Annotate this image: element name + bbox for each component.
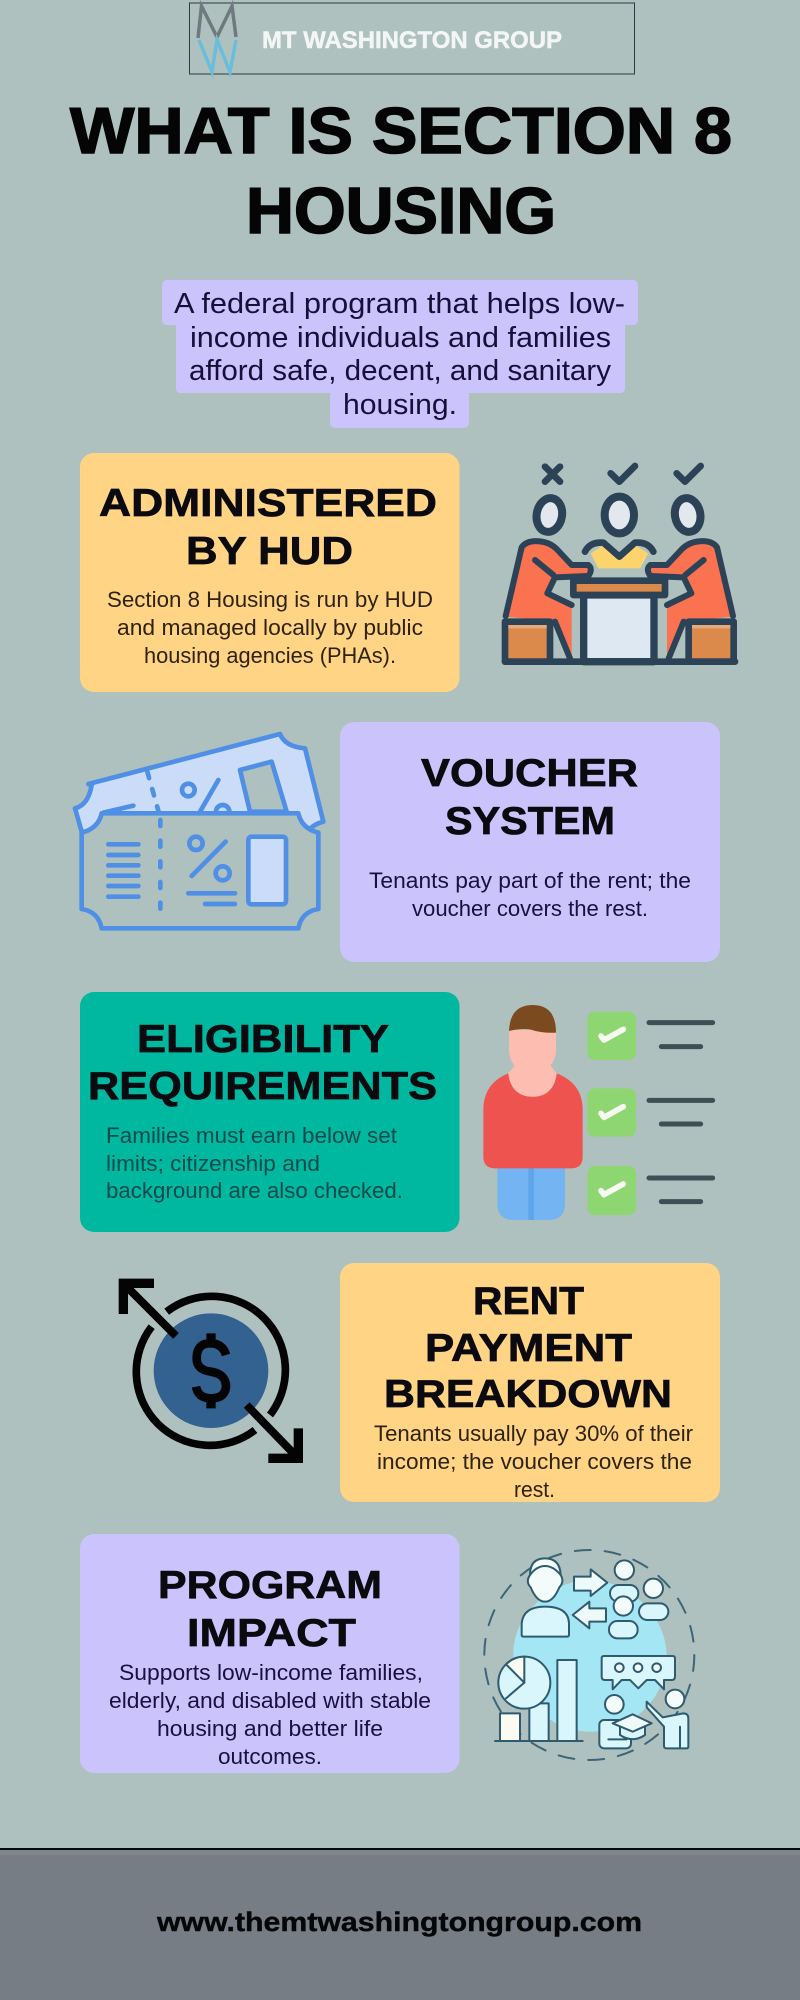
audience [609,1560,668,1638]
body text: outcomes. [218,1744,322,1769]
heading: program impact [158,1564,382,1655]
heading: rent payment breakdown: RENT [473,1280,584,1323]
heading: voucher system [421,752,638,843]
body text: background are also checked. [106,1178,403,1203]
body text: housing agencies (PHAs). [144,643,396,668]
title: WHAT IS SECTION 8 [70,94,732,167]
panel: administered by HUD [80,453,460,692]
body text: and managed locally by public [117,615,423,640]
icon: person with checklist [483,1005,713,1220]
exchange arrows [573,1569,607,1628]
body text: Tenants pay part of the rent; the [369,868,691,893]
student and teacher [599,1690,688,1748]
heading: eligibility requirements: REQUIREMENTS [88,1065,437,1108]
body text [107,587,433,668]
icon: community program impact [484,1550,694,1760]
checklist [587,1012,713,1215]
title: HOUSING [246,174,556,247]
body text: voucher covers the rest. [412,896,648,921]
body text: income; the voucher covers the [377,1449,692,1474]
heading: administered by HUD: BY HUD [186,530,353,573]
heading: eligibility requirements: ELIGIBILITY [137,1018,389,1061]
logo wordmark: MT WASHINGTON GROUP [262,27,562,54]
icon: dollar with arrows [123,1283,298,1458]
footer band [0,1848,800,2000]
body text: rest. [514,1477,555,1502]
heading: eligibility requirements [88,1018,437,1108]
panel: eligibility requirements [80,992,460,1232]
panel: program impact [80,1534,460,1773]
body text [109,1660,431,1769]
front ticket [82,813,318,928]
heading: program impact: IMPACT [187,1612,356,1655]
body text: Tenants usually pay 30% of their [374,1421,693,1446]
body text [106,1123,403,1203]
body text: Families must earn below set [106,1123,397,1148]
website address: www.themtwashingtongroup.com [156,1907,642,1937]
bar and pie chart [495,1657,583,1741]
subtitle with highlight: A federal program that helps low- [174,288,625,320]
title [70,94,732,247]
body text: elderly, and disabled with stable [109,1688,431,1713]
heading: voucher system: SYSTEM [445,800,615,843]
body text: Supports low-income families, [119,1660,423,1685]
icon: vouchers [75,734,323,928]
body text: limits; citizenship and [106,1151,320,1176]
back ticket [75,734,323,832]
logo banner [190,3,634,74]
heading: rent payment breakdown [384,1280,672,1416]
body text: housing and better life [157,1716,383,1741]
icon: MW monogram [198,6,236,72]
body text: Section 8 Housing is run by HUD [107,587,433,612]
heading: voucher system: VOUCHER [421,752,638,795]
subtitle with highlight [162,280,638,428]
panel: voucher system [340,722,720,962]
subtitle with highlight: income individuals and families [190,322,611,354]
body text [374,1421,693,1502]
body text [369,868,691,921]
speech bubble [602,1656,675,1689]
heading: rent payment breakdown: PAYMENT [425,1327,632,1370]
heading: administered by HUD [99,482,437,573]
subtitle with highlight: afford safe, decent, and sanitary [189,355,612,387]
heading: program impact: PROGRAM [158,1564,382,1607]
heading: rent payment breakdown: BREAKDOWN [384,1373,672,1416]
heading: administered by HUD: ADMINISTERED [99,482,437,525]
panel: rent payment breakdown [340,1263,720,1502]
subtitle with highlight: housing. [343,389,457,421]
icon: three people at a table [505,466,735,662]
person [483,1005,583,1220]
speaker [522,1558,569,1637]
